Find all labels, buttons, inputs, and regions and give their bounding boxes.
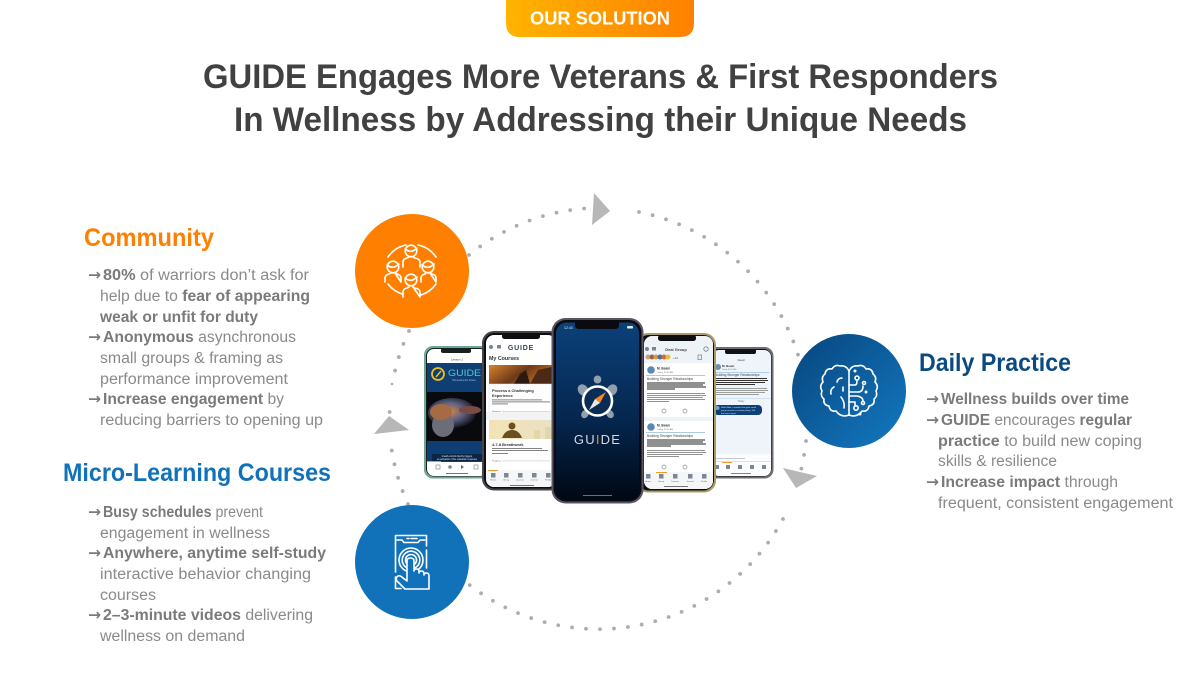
phone: lesson screen (far left): Harnessing the Power (452, 379, 476, 382)
banner: our solution (506, 0, 694, 37)
phone: deal group: Deal Group (665, 347, 687, 352)
phone: my courses: Group (503, 478, 510, 482)
bullets: community: help due to fear of appearing (100, 288, 310, 305)
bullets: community: Increase engagement by (103, 391, 284, 408)
bullets: micro-learning: → (88, 606, 101, 624)
bullets: daily practice: frequent, consistent engagement (938, 495, 1174, 512)
circle: micro-learning (355, 505, 469, 619)
icon: group of people (385, 245, 436, 297)
phone: small group feed (far right): Today (738, 400, 745, 403)
phone: lesson screen (far left): GUIDE (448, 368, 481, 378)
bullets: micro-learning: → (88, 503, 101, 521)
phone: deal group: Today, 09:55 AM (657, 428, 673, 431)
phone: small group feed (far right): M. Beam (722, 364, 735, 368)
phone: my courses: Journal (530, 478, 538, 482)
bullets: community (88, 266, 323, 429)
phone: deal group: Today, 09:55 AM (657, 371, 673, 374)
bullets: community: small groups & framing as (100, 350, 283, 367)
arrow: right (783, 468, 817, 488)
phone: small group feed (far right): Building Stronger Relationships (715, 373, 760, 377)
bullets: daily practice: skills & resilience (938, 453, 1057, 470)
circle: community (355, 214, 469, 328)
phone: deal group: +12 (673, 356, 678, 360)
phone: my courses: Courses (516, 478, 525, 482)
phone: guide splash (center): 12:43 (564, 326, 573, 330)
bullets: daily practice: Increase impact through (941, 474, 1118, 491)
phone: lesson screen (far left): Lesson 1 (451, 358, 463, 362)
phone: my courses: My Courses (489, 356, 519, 362)
title: GUIDE Engages More Veterans & First Responders (203, 58, 998, 96)
phone: deal group: Journal (686, 480, 694, 483)
phone: deal group: Building Stronger Relationships (647, 434, 693, 438)
bullets: daily practice: → (926, 473, 939, 491)
phone: my courses: Profile (545, 478, 552, 482)
circle: daily practice (792, 334, 906, 448)
bullets: daily practice: → (926, 390, 939, 408)
text block: daily practice (919, 349, 1174, 512)
wordmark: GUIDE: GUIDE (574, 432, 621, 447)
phone: my courses: Progress (492, 460, 502, 462)
bullets: micro-learning: 2–3-minute videos delivering (103, 607, 313, 624)
phone: my courses (482, 331, 552, 490)
bullets: daily practice: → (926, 411, 939, 429)
bullets: micro-learning: wellness on demand (99, 628, 245, 645)
bullets: micro-learning: Anywhere, anytime self-study (103, 545, 326, 562)
icon: finger tapping phone (396, 536, 429, 589)
bullets: micro-learning: courses (100, 587, 156, 604)
phone: deal group: M. Beam (657, 366, 670, 370)
phone: deal group: Profile (701, 480, 708, 483)
phone: deal group: M. Beam (657, 424, 670, 428)
bullets: daily practice: Wellness builds over time (941, 391, 1129, 408)
phone: small group feed (far right): Feed (738, 358, 745, 362)
phone: deal group: Building Stronger Relationships (647, 377, 693, 381)
phone: deal group: Courses (671, 480, 680, 483)
phone: deal group (636, 333, 716, 492)
bullets: daily practice (926, 390, 1174, 512)
phone: small group feed (far right): Hello Mike, I wonder how your small (721, 406, 757, 409)
bullets: micro-learning: interactive behavior changing (100, 566, 311, 583)
heading: micro-learning courses: Micro-Learning Courses (63, 459, 331, 487)
icon: turtle compass logo (575, 376, 620, 420)
heading: community: Community (84, 224, 214, 252)
phone: small group feed (far right) (716, 347, 774, 478)
icon: digital brain (821, 365, 877, 416)
phone: deal group: Home (645, 481, 652, 483)
phone: my courses: 4-7-8 Breathwork (492, 442, 524, 447)
bullets: community: Anonymous asynchronous (103, 329, 296, 346)
banner: our solution: OUR SOLUTION (530, 8, 670, 28)
phone: small group feed (far right): me how it went. (721, 412, 737, 415)
bullets: micro-learning: Busy schedules prevent (103, 504, 264, 521)
bullets: community: → (88, 328, 101, 346)
phone: my courses: Home (490, 480, 497, 482)
bullets: community: → (88, 266, 101, 284)
phone: small group feed (far right): Today 09:55 AM (722, 368, 737, 371)
phone: small group feed (far right): group session is coming along. Tell (721, 409, 755, 412)
bullets: micro-learning: engagement in wellness (100, 525, 270, 542)
bullets: daily practice: practice to build new coping (938, 433, 1142, 450)
phone: guide splash (center) (552, 318, 644, 504)
arrow: left (374, 416, 409, 434)
phone: lesson screen (far left) (424, 346, 482, 478)
bullets: community: weak or unfit for duty (99, 309, 258, 326)
bullets: micro-learning: → (88, 544, 101, 562)
phone: deal group: Group (658, 480, 665, 483)
heading: daily practice: Daily Practice (919, 349, 1071, 377)
bullets: community: → (88, 390, 101, 408)
title (203, 58, 998, 139)
phone: my courses: Progress (492, 410, 502, 413)
phone: my courses: GUIDE (508, 345, 534, 352)
phone: my courses: Experience (492, 393, 514, 398)
text block: community (84, 224, 323, 429)
phone: lesson screen (far left): breath-control directly triggers (442, 455, 473, 458)
dotted cycle ring with arrows (374, 193, 817, 629)
bullets: community: 80% of warriors don’t ask for (103, 267, 309, 284)
bullets: daily practice: GUIDE encourages regular (941, 412, 1132, 429)
arrow: top (592, 193, 610, 225)
title: In Wellness by Addressing their Unique Needs (234, 101, 967, 139)
bullets: micro-learning (88, 503, 326, 645)
text block: micro-learning courses (63, 459, 331, 645)
phone: lesson screen (far left): an activation of the relaxation response (437, 458, 478, 461)
phone: my courses: Process a Challenging (492, 388, 534, 393)
bullets: community: performance improvement (100, 371, 289, 388)
bullets: community: reducing barriers to opening up (100, 412, 323, 429)
